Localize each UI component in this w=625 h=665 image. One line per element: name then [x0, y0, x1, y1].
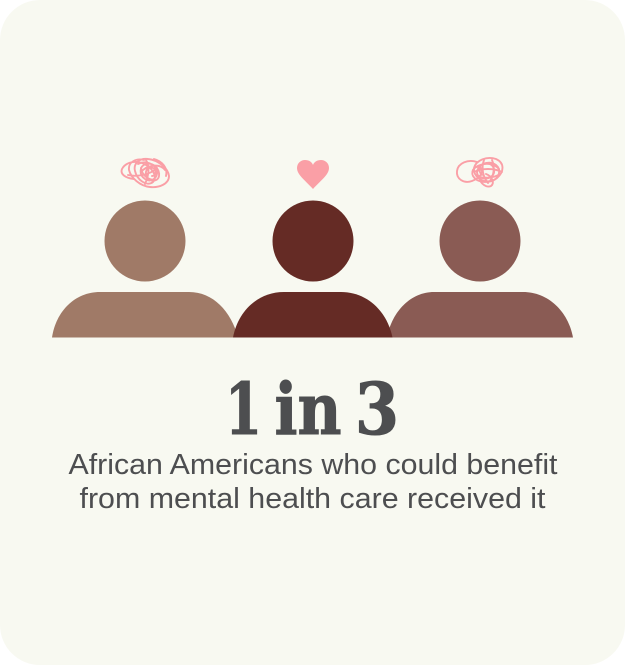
- description line 1: African Americans who could benefit: [68, 449, 558, 481]
- person: left: [52, 200, 238, 338]
- shoulders: right: [387, 292, 573, 338]
- description line 2: from mental health care received it: [80, 483, 546, 515]
- person: right: [387, 200, 573, 338]
- description: [68, 449, 558, 515]
- head: centre: [272, 200, 354, 282]
- head: left: [104, 200, 186, 282]
- stat: word in: in: [274, 367, 342, 451]
- stat: denominator: 3: [355, 367, 399, 451]
- icon: heart: [297, 160, 329, 189]
- person: centre: [233, 200, 392, 338]
- stat: 1 in 3: [225, 367, 399, 451]
- shoulders: centre: [233, 292, 392, 338]
- shoulders: left: [52, 292, 238, 338]
- icon: left scribble: [122, 159, 169, 187]
- icon: right scribble: [457, 158, 502, 187]
- stat: numerator: 1: [225, 367, 262, 451]
- head: right: [440, 200, 520, 282]
